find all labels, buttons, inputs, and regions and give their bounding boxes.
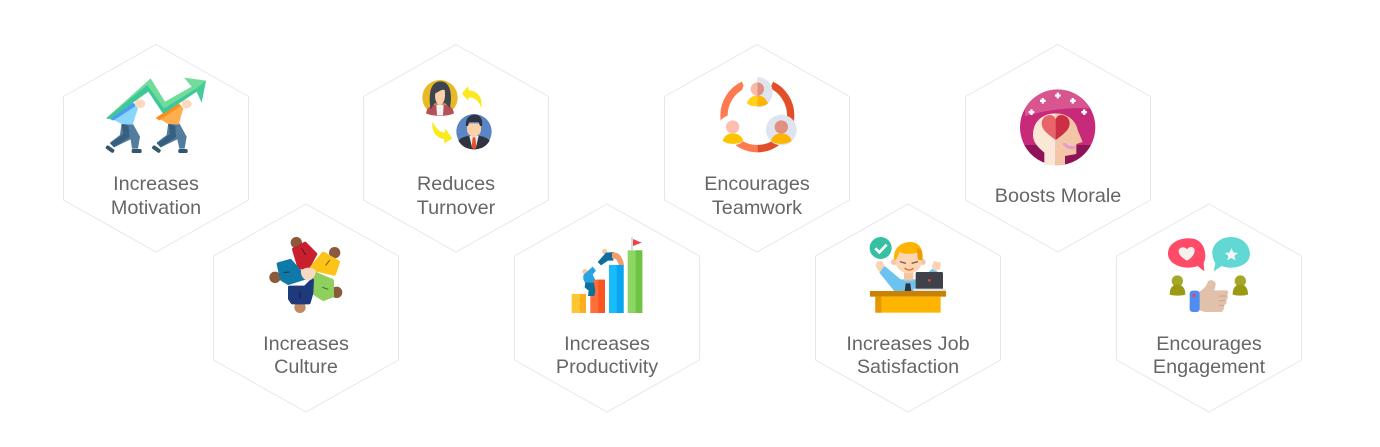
icon: team joining hands in a circle bbox=[269, 237, 342, 313]
panel: increases motivation bbox=[64, 44, 248, 252]
label: Motivation bbox=[111, 197, 201, 219]
label: Culture bbox=[274, 356, 338, 378]
label: Increases bbox=[113, 173, 199, 195]
icon: speech bubbles, thumbs up and people bbox=[1168, 237, 1250, 312]
hexagon outline bbox=[816, 204, 1000, 412]
label: Boosts Morale bbox=[995, 185, 1121, 207]
panel: increases culture bbox=[214, 204, 398, 412]
hexagon outline bbox=[664, 44, 850, 252]
label: Increases Job bbox=[846, 333, 970, 355]
label: Turnover bbox=[417, 197, 496, 219]
label: Increases bbox=[564, 333, 650, 355]
label: Reduces bbox=[417, 173, 495, 195]
panel: reduces turnover bbox=[364, 44, 548, 252]
icon: happy worker at a desk bbox=[870, 237, 946, 313]
hexagon outline bbox=[214, 204, 398, 412]
panel: encourages engagement bbox=[1116, 204, 1302, 412]
panel: encourages teamwork bbox=[664, 44, 850, 252]
icon: head with heart bbox=[1020, 89, 1095, 165]
label: Engagement bbox=[1153, 356, 1266, 378]
icon: woman and man exchanging arrows bbox=[422, 80, 492, 149]
hexagon outline bbox=[64, 44, 248, 252]
icon: climbing a bar chart bbox=[572, 237, 642, 313]
label: Productivity bbox=[556, 356, 658, 378]
hexagon outline bbox=[966, 44, 1150, 252]
label: Encourages bbox=[704, 173, 810, 195]
panel: boosts morale bbox=[966, 44, 1150, 252]
panel: increases productivity bbox=[514, 204, 700, 412]
icon: two people carrying a rising arrow bbox=[105, 78, 206, 153]
label: Teamwork bbox=[712, 197, 802, 219]
hexagon outline bbox=[514, 204, 700, 412]
icon: three people in a ring bbox=[717, 77, 797, 149]
label: Increases bbox=[263, 333, 349, 355]
hexagon outline bbox=[1116, 204, 1302, 412]
label: Encourages bbox=[1156, 333, 1262, 355]
panel: increases job satisfaction bbox=[816, 204, 1000, 412]
hexagon outline bbox=[364, 44, 548, 252]
label: Satisfaction bbox=[857, 356, 959, 378]
